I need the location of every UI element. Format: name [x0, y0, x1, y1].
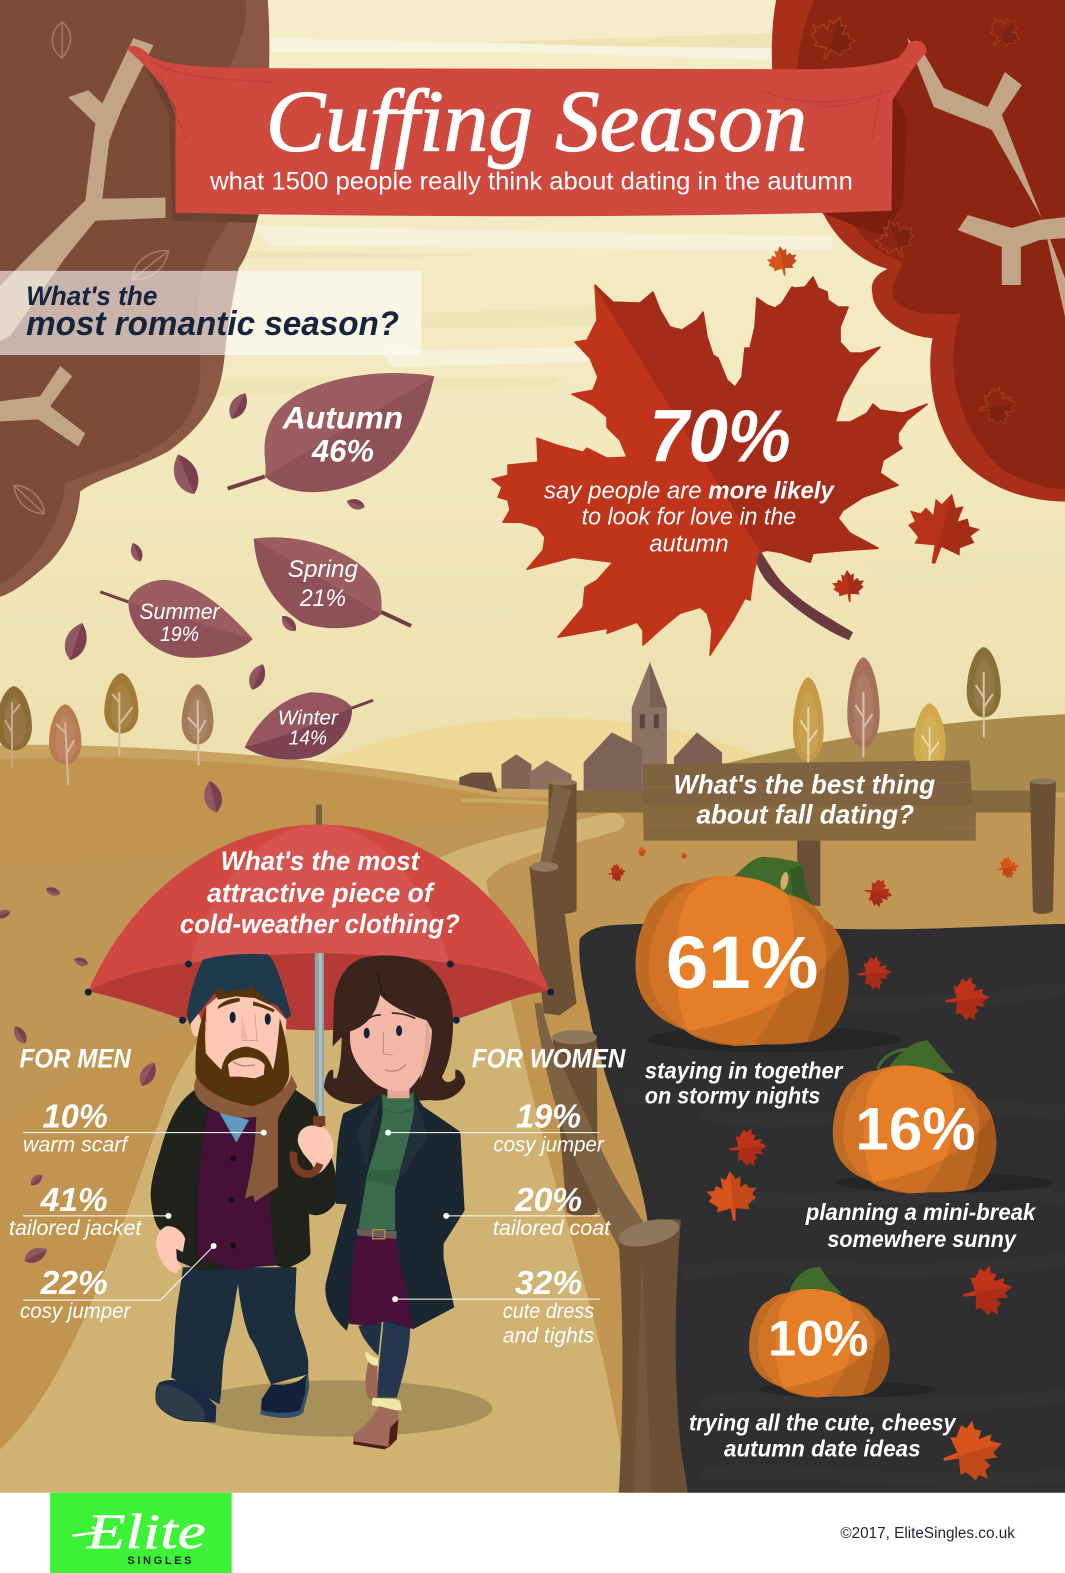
- callouts: for women: FOR WOMEN: [472, 1042, 627, 1073]
- logo: Elite Singles: Elite: [86, 1503, 206, 1559]
- leaf: Autumn 46%: 46%: [311, 433, 374, 468]
- leaf: Spring 21%: 21%: [299, 585, 346, 612]
- hand and umbrella handle: [293, 1116, 334, 1174]
- callouts: for women: 32%: [515, 1265, 582, 1302]
- ground shadow: [186, 1380, 492, 1437]
- falling small leaves: [0, 390, 366, 1266]
- heading: most romantic season: most romantic season?: [26, 305, 399, 343]
- right tree canopy: [772, 0, 1065, 502]
- left tree branches: [0, 38, 165, 446]
- distant hills: [321, 714, 1065, 803]
- pumpkin: 16%: somewhere sunny: [827, 1226, 1017, 1252]
- umbrella: attractive piece of: [207, 877, 436, 908]
- pumpkin: 61%: [635, 857, 902, 1109]
- title: Cuffing Season: [266, 72, 807, 170]
- maple leaf callout: 70%: 70%: [649, 394, 791, 477]
- wooden sign: best thing about fall dating: [643, 760, 976, 841]
- logo: Elite Singles: [50, 1493, 232, 1573]
- callouts: for men: 10%: [43, 1099, 108, 1136]
- leaf: Spring 21%: [254, 537, 411, 628]
- woman: [324, 955, 465, 1449]
- leaf: Summer 19%: Summer: [139, 599, 221, 624]
- pumpkin: 61%: 61%: [666, 921, 818, 1004]
- callouts: for women: 19%: [516, 1099, 581, 1136]
- figures: couple: [151, 954, 465, 1449]
- right tree branches: [907, 38, 1065, 320]
- callouts: for women: 20%: [514, 1182, 582, 1219]
- wooden sign: best thing about fall dating: about fall dating?: [696, 799, 914, 830]
- leaf: Summer 19%: [100, 580, 253, 658]
- heading: most romantic season: [0, 271, 421, 355]
- callouts: for men: FOR MEN: [20, 1042, 132, 1073]
- leaf: Winter 14%: [245, 692, 373, 759]
- pumpkin: 61%: staying in together: [645, 1057, 844, 1083]
- callouts: for women: [385, 1042, 627, 1347]
- pumpkin: 16%: planning a mini-break: [805, 1199, 1037, 1225]
- leaf: Autumn 46%: Autumn: [282, 400, 403, 435]
- umbrella: What's the most: [221, 845, 420, 876]
- sky background: [0, 0, 1065, 803]
- copyright: ©2017, EliteSingles.co.uk: [840, 1524, 1016, 1542]
- pumpkin: 61%: on stormy nights: [645, 1083, 820, 1109]
- callouts: for men: 22%: [40, 1265, 108, 1302]
- maple leaf callout: 70%: say people are more likely: [544, 478, 835, 505]
- callouts: for women: cosy jumper: [493, 1134, 605, 1157]
- pumpkin: 16%: [805, 1040, 1053, 1252]
- title banner: [126, 41, 927, 216]
- fence and logs: [529, 778, 1056, 1495]
- wooden sign: best thing about fall dating: What's the best thing: [673, 769, 936, 800]
- horizon trees: [0, 647, 1001, 785]
- callouts: for men: [9, 1042, 267, 1323]
- callouts: for women: cute dress: [503, 1300, 595, 1323]
- callouts: for women: tailored coat: [493, 1217, 611, 1240]
- umbrella: cold-weather clothing?: [180, 908, 460, 939]
- man: [151, 954, 337, 1423]
- leaf: Autumn 46%: [228, 373, 434, 492]
- callouts: for men: warm scarf: [23, 1134, 130, 1157]
- callouts: for women: and tights: [503, 1324, 595, 1347]
- subtitle: what 1500 people really think about dating in the autumn: [209, 168, 853, 196]
- umbrella: [85, 805, 554, 1119]
- left tree canopy: [0, 0, 269, 597]
- heading: most romantic season: What's the: [26, 280, 157, 311]
- maple leaves scattered: [606, 243, 1021, 1488]
- leaf: Winter 14%: 14%: [289, 727, 327, 749]
- pumpkin: 10%: 10%: [768, 1310, 868, 1366]
- leaf: Summer 19%: 19%: [160, 623, 199, 646]
- maple leaf callout: 70%: to look for love in the: [582, 504, 796, 531]
- pumpkin: 16%: 16%: [855, 1096, 976, 1163]
- callouts: for men: cosy jumper: [20, 1300, 131, 1323]
- pumpkin: 10%: trying all the cute, cheesy: [689, 1410, 957, 1436]
- leaf: Winter 14%: Winter: [278, 707, 339, 729]
- maple leaf callout: 70%: [492, 277, 927, 655]
- dark road: [579, 924, 1065, 1495]
- village and church: [501, 662, 722, 793]
- ground: [0, 745, 1065, 1495]
- leaf: Spring 21%: Spring: [288, 556, 359, 583]
- maple leaf callout: 70%: autumn: [649, 531, 729, 558]
- pumpkin: 10%: [689, 1267, 957, 1462]
- logo: Elite Singles: SINGLES: [127, 1555, 192, 1567]
- pumpkin: 10%: autumn date ideas: [724, 1436, 921, 1462]
- callouts: for men: tailored jacket: [9, 1217, 143, 1240]
- callouts: for men: 41%: [40, 1182, 108, 1219]
- footer: [0, 1493, 1065, 1573]
